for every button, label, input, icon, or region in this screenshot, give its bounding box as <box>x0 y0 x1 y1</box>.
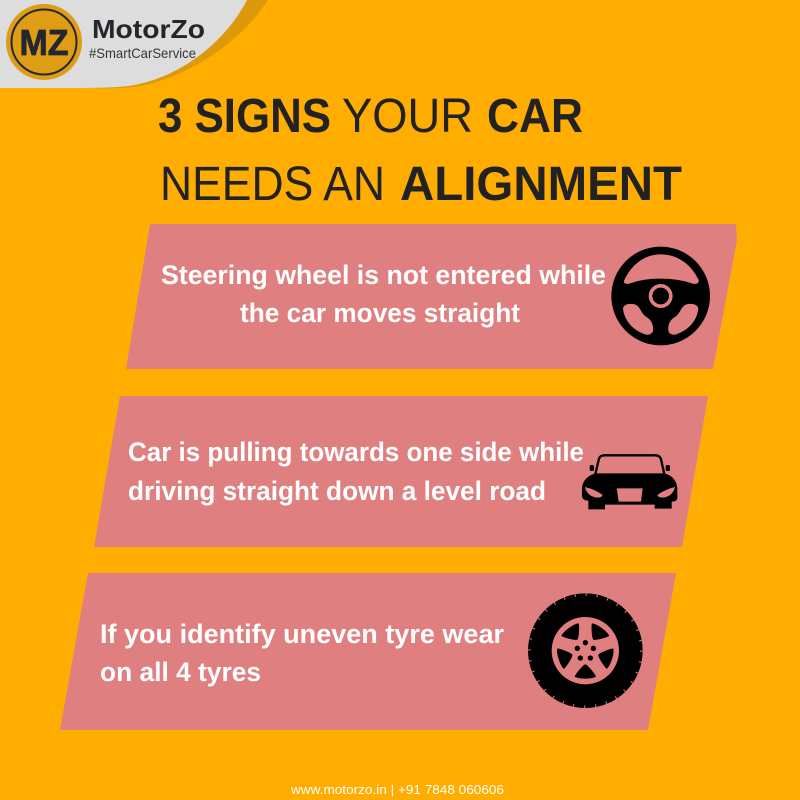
title: CAR <box>487 90 583 143</box>
panel text <box>128 437 584 506</box>
title: YOUR <box>342 90 473 143</box>
panel text: on all 4 tyres <box>100 657 261 687</box>
panel: uneven tyre wear sign <box>60 573 676 730</box>
panel text <box>161 260 606 328</box>
panel text: driving straight down a level road <box>128 476 546 506</box>
logo badge <box>6 4 82 80</box>
title: 3 SIGNS <box>158 90 331 143</box>
brand name: MotorZo <box>92 14 205 44</box>
title: ALIGNMENT <box>400 158 682 211</box>
panel text: If you identify uneven tyre wear <box>100 619 504 649</box>
panel text: Steering wheel is not entered while <box>161 260 606 290</box>
panel text: the car moves straight <box>240 298 520 328</box>
panel: steering wheel sign <box>126 224 737 369</box>
title: NEEDS AN <box>160 158 385 211</box>
icon: steering wheel <box>611 247 710 345</box>
panel text <box>100 619 504 687</box>
tagline: #SmartCarService <box>89 45 196 61</box>
logo badge: MZ <box>20 22 68 63</box>
icon: car front <box>582 455 677 509</box>
title <box>158 90 682 211</box>
footer contact line: www.motorzo.in | +91 7848 060606 <box>290 782 504 797</box>
header brand block <box>0 0 268 88</box>
icon: tyre <box>528 593 643 708</box>
panel text: Car is pulling towards one side while <box>128 437 584 467</box>
panel: car pulling sign <box>94 396 708 547</box>
